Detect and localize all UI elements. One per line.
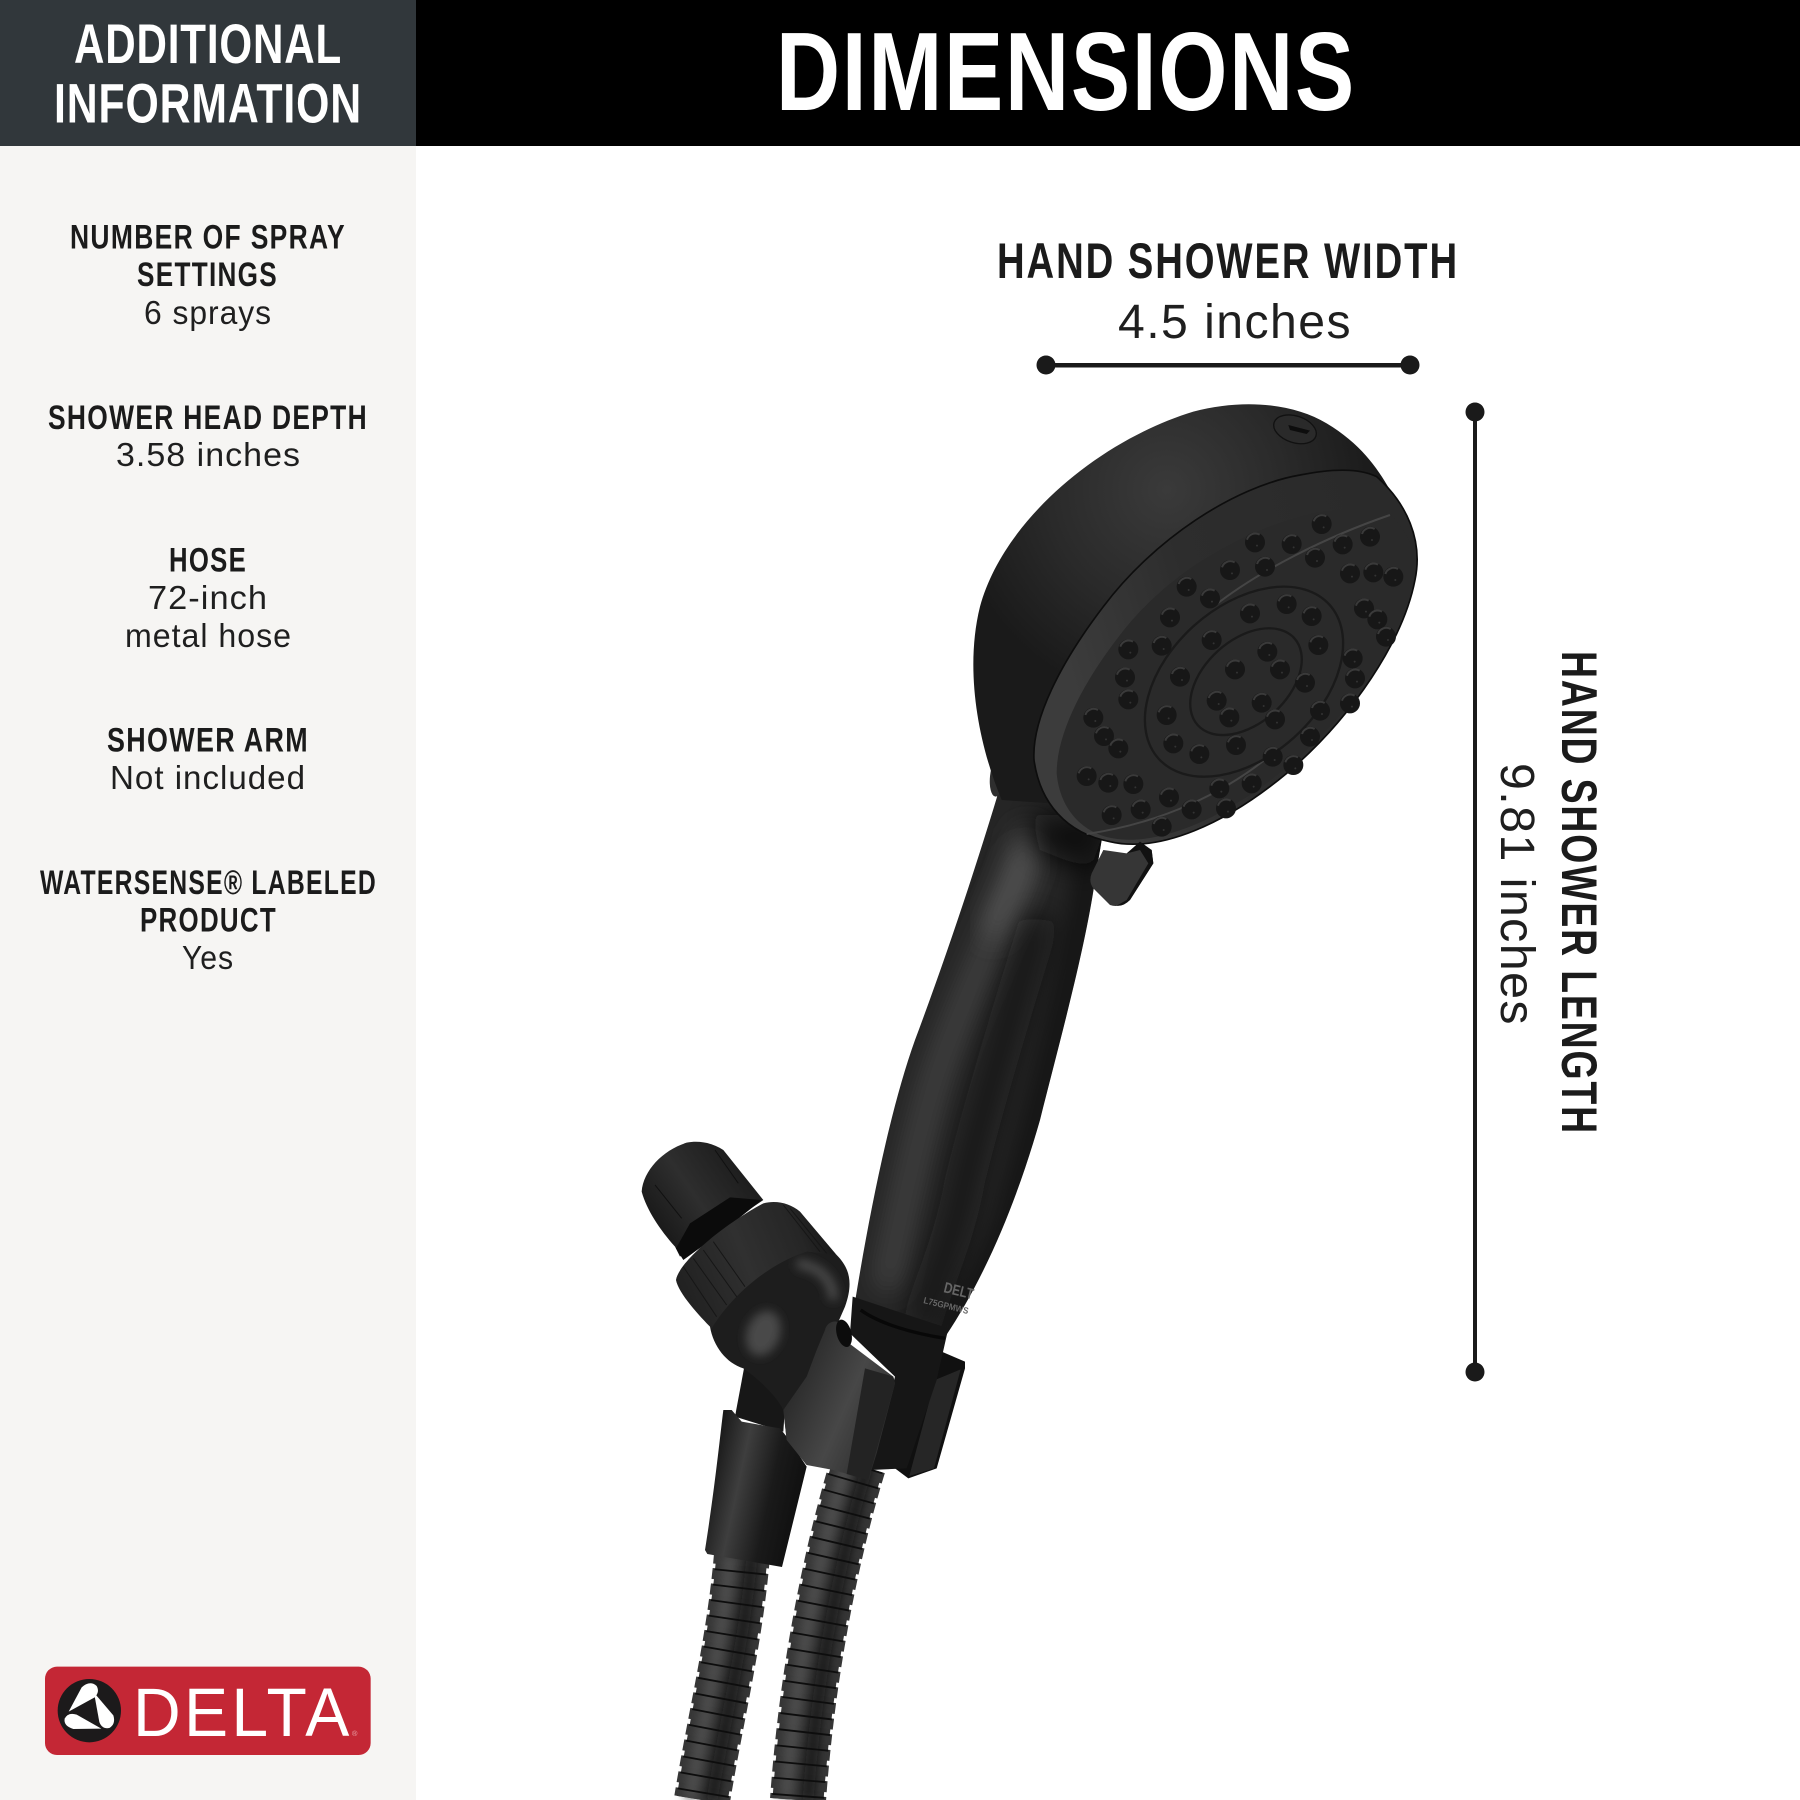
face bezel: [1034, 470, 1417, 844]
spec: shower head depth: [48, 399, 368, 473]
width dimension label: HAND SHOWER WIDTH: [997, 233, 1459, 289]
spec: spray settings: NUMBER OF SPRAY: [70, 218, 346, 256]
delta logo: ®: [352, 1729, 358, 1738]
spec: spray settings: 6 sprays: [144, 294, 272, 331]
title: DIMENSIONS: [776, 10, 1356, 134]
width dimension label: 4.5 inches: [1118, 296, 1352, 349]
spec: spray settings: SETTINGS: [137, 256, 278, 294]
wall mount bracket: [642, 1142, 965, 1567]
product: hand shower: [642, 404, 1417, 1800]
spec: watersense: Yes: [182, 939, 234, 976]
spray grooves: [1087, 515, 1390, 834]
spec: shower arm: SHOWER ARM: [107, 722, 309, 760]
handle markings: DELT: [942, 1279, 975, 1303]
top knob: [642, 1142, 763, 1257]
right hose: [786, 1465, 868, 1800]
knob neck: [676, 1197, 762, 1260]
length dimension label: [1490, 651, 1607, 1135]
lower barrel: [705, 1410, 807, 1567]
spec: hose: 72-inch: [148, 579, 268, 616]
swivel ring: [676, 1202, 837, 1328]
delta logo: DELTA: [133, 1674, 353, 1751]
spec: watersense: PRODUCT: [140, 902, 277, 940]
left hose: [690, 1555, 752, 1800]
holder plate: [909, 1369, 961, 1476]
spec: hose: HOSE: [169, 542, 247, 580]
spec: shower arm: [107, 722, 309, 796]
sidebar header: ADDITIONAL: [74, 12, 342, 75]
handle: [856, 794, 1102, 1334]
delta logo: [45, 1667, 371, 1755]
top button: [1270, 410, 1320, 449]
width dimension arrow: [1036, 356, 1420, 374]
spray toggle: [1090, 842, 1153, 906]
hand shower lower neck: [850, 1297, 948, 1470]
sidebar header: INFORMATION: [54, 72, 362, 134]
length dimension arrow: [1466, 402, 1484, 1382]
lower pipe: [735, 1368, 785, 1432]
spec: shower head depth: SHOWER HEAD DEPTH: [48, 399, 368, 437]
back housing: [973, 404, 1390, 813]
spec: hose: [125, 542, 292, 654]
holder back: [895, 1352, 965, 1478]
top banner: [416, 0, 1800, 146]
head assembly: [973, 404, 1417, 844]
length dimension label: 9.81 inches: [1490, 763, 1543, 1026]
swivel body: [710, 1247, 850, 1465]
pivot tab: [988, 756, 1007, 797]
sidebar header: [0, 0, 416, 146]
spray nozzles: [1077, 514, 1403, 837]
sidebar panel background: [0, 0, 416, 1800]
width dimension label: [997, 233, 1459, 349]
spec: hose: metal hose: [125, 617, 292, 654]
clip: [783, 1318, 895, 1480]
spec: shower arm: Not included: [110, 759, 306, 796]
spec: shower head depth: 3.58 inches: [116, 436, 301, 473]
spec: watersense: WATERSENSE® LABELED: [40, 864, 377, 902]
spec: watersense: [40, 864, 377, 976]
length dimension label: HAND SHOWER LENGTH: [1551, 651, 1607, 1135]
handle markings: [923, 1279, 975, 1316]
handle markings: L75GPMWS: [923, 1295, 970, 1316]
spec: spray settings: [70, 218, 346, 331]
spray face: [1057, 510, 1415, 840]
collar ring: [861, 1310, 945, 1338]
